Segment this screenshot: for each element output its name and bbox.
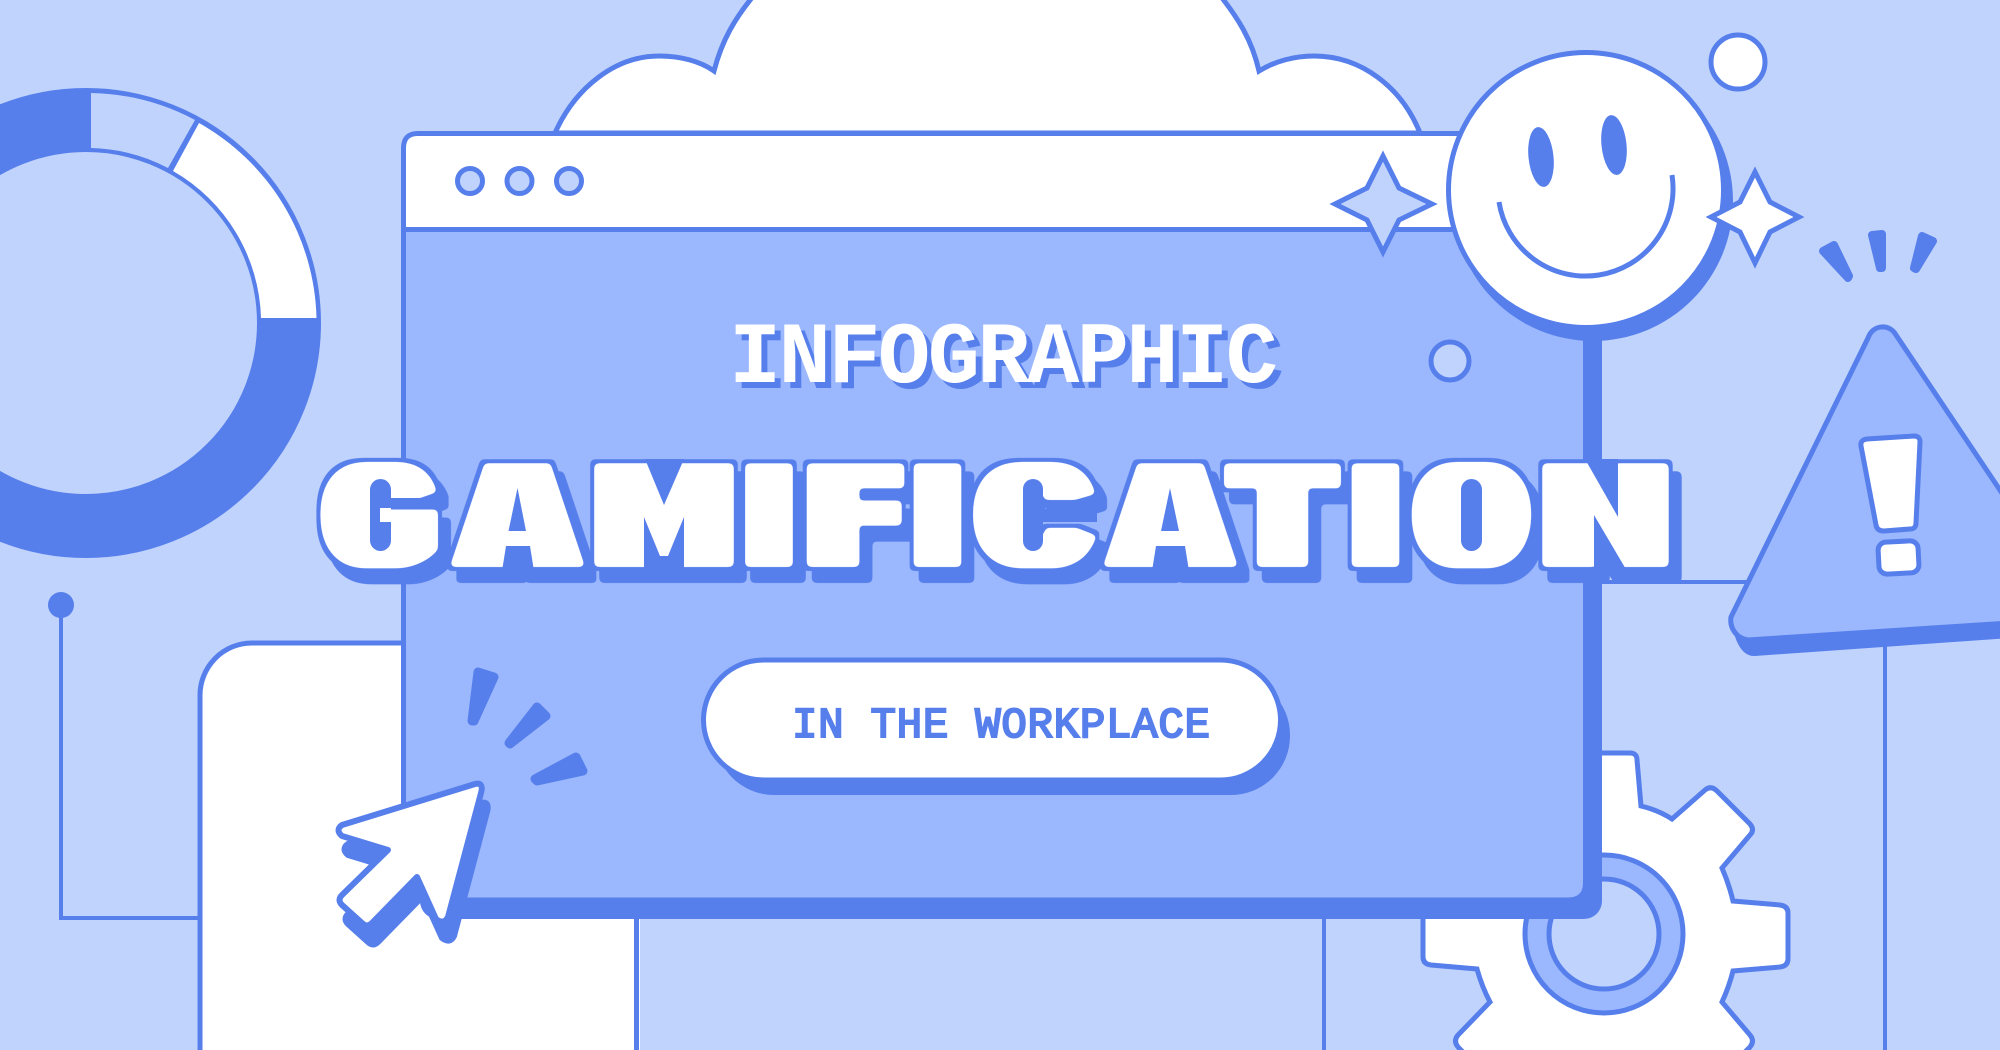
warning triangle bbox=[1731, 327, 2000, 656]
letter A: A bbox=[1123, 435, 1218, 594]
panel outline bbox=[200, 643, 636, 1050]
stem letters: F bbox=[807, 440, 903, 596]
vertical pole under warning sign bbox=[1883, 630, 1887, 1050]
tick right bbox=[1914, 236, 1933, 269]
stem letters: I bbox=[747, 439, 791, 596]
gear hole bbox=[1549, 879, 1659, 989]
warning ticks bbox=[1823, 234, 1933, 278]
vertical divider line bbox=[1322, 900, 1326, 1050]
subtitle: INFOGRAPHIC: INFOGRAPHIC bbox=[729, 311, 1278, 409]
cursor body bbox=[338, 784, 482, 926]
triangle body bbox=[1731, 327, 2000, 640]
C counter bbox=[1023, 479, 1043, 551]
stem letters bbox=[747, 439, 1398, 596]
smiley bbox=[1448, 52, 1733, 341]
cursor shadow bbox=[344, 803, 488, 944]
exclamation dot bbox=[1878, 540, 1919, 574]
sparkle on title bar bbox=[1335, 156, 1432, 252]
right eye bbox=[1598, 114, 1630, 176]
N notches bbox=[1585, 459, 1627, 571]
letters with diagonal strokes: N bbox=[1549, 436, 1662, 594]
cursor bbox=[338, 784, 488, 944]
G counter bbox=[370, 479, 391, 551]
stem letters: I bbox=[915, 439, 960, 596]
A counters bbox=[502, 488, 534, 571]
exclamation bar bbox=[1861, 436, 1920, 531]
round letters: G bbox=[332, 437, 429, 595]
horizontal line to warning sign bbox=[1600, 580, 1760, 584]
smiley face bbox=[1448, 52, 1724, 328]
title: GAMIFICATION bbox=[332, 435, 1662, 596]
letter A: A bbox=[470, 435, 565, 594]
pill shadow bbox=[715, 676, 1290, 795]
browser window bbox=[404, 134, 1602, 919]
sparkle beside smiley bbox=[1711, 172, 1799, 263]
click tick 3 bbox=[535, 757, 583, 781]
small circle in window bbox=[1431, 342, 1469, 380]
pill label: IN THE WORKPLACE bbox=[792, 702, 1210, 750]
click tick 2 bbox=[509, 707, 546, 744]
triangle shadow bbox=[1733, 600, 2000, 656]
window dot 1 bbox=[458, 168, 482, 194]
left eye bbox=[1525, 126, 1557, 188]
small white circle bbox=[1711, 35, 1765, 89]
tick left bbox=[1823, 245, 1849, 278]
pill body bbox=[704, 660, 1280, 780]
O counter bbox=[1461, 479, 1482, 551]
window dot 3 bbox=[556, 168, 582, 194]
white rounded panel bbox=[202, 644, 640, 1050]
stem letters: I bbox=[1353, 439, 1398, 596]
window dot 2 bbox=[507, 168, 532, 194]
round letters: C bbox=[984, 436, 1083, 595]
title letter counters and notches bbox=[370, 459, 1627, 571]
round letters: O bbox=[1423, 436, 1520, 595]
cloud bbox=[555, 0, 1420, 133]
letters with diagonal strokes: M bbox=[601, 437, 727, 595]
mouth bbox=[1499, 175, 1673, 276]
donut segment: white bbox=[173, 123, 316, 318]
click ticks bbox=[472, 672, 583, 781]
tick middle bbox=[1872, 234, 1882, 268]
M notches bbox=[644, 459, 684, 571]
pill button bbox=[704, 660, 1290, 795]
window body bbox=[404, 230, 1583, 898]
stem letters: T bbox=[1236, 440, 1329, 596]
gear icon bbox=[1423, 753, 1788, 1050]
letter A bbox=[470, 435, 1218, 594]
letters with diagonal strokes bbox=[601, 436, 1662, 595]
connector line with dot bbox=[48, 592, 205, 918]
donut segment: light bbox=[91, 93, 195, 168]
window outline bbox=[404, 134, 1500, 897]
window shadow bbox=[420, 150, 1602, 919]
gear ring bbox=[1525, 855, 1683, 1013]
round letters bbox=[332, 436, 1520, 595]
smiley shadow bbox=[1453, 61, 1733, 341]
click tick 1 bbox=[472, 672, 494, 721]
window title bar bbox=[404, 134, 1500, 230]
donut chart bbox=[0, 93, 316, 526]
